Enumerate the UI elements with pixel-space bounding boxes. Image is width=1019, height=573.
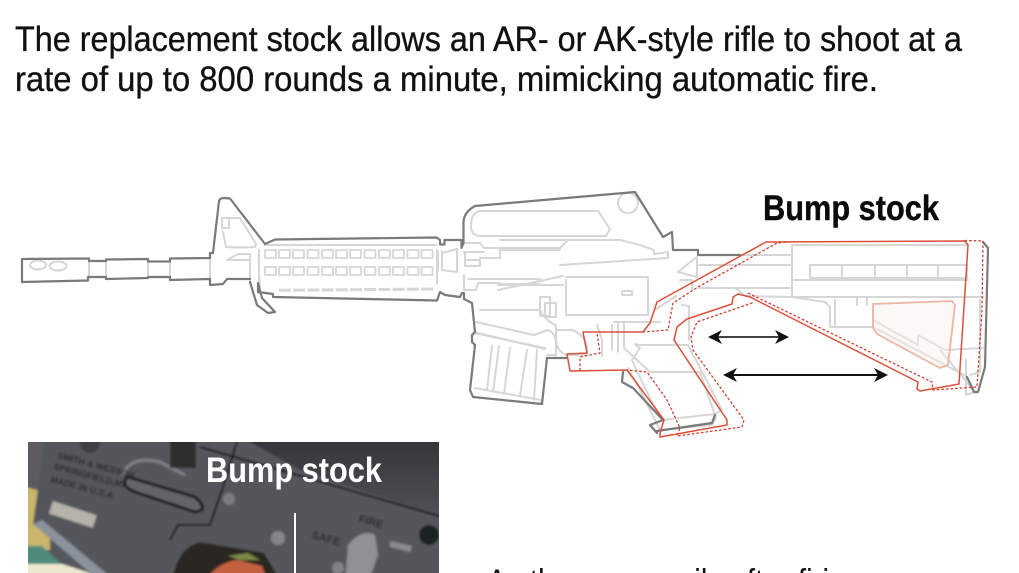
intro text [15, 20, 962, 99]
engraved markings [49, 450, 385, 548]
photo background and receiver [46, 538, 92, 573]
trigger guard and hand [172, 542, 282, 573]
rifle diagram [22, 189, 988, 437]
intro text: rate of up to 800 rounds a minute, mimicking automatic fire. [15, 60, 878, 99]
bump stock label: Bump stock [763, 189, 939, 228]
engraved markings: MADE IN U.S.A. [49, 474, 117, 501]
photo leader line [294, 513, 296, 573]
photo: bump stock on rifle [28, 442, 439, 573]
engraved markings: SPRINGFIELD,MA [52, 461, 130, 491]
photo label: Bump stock [206, 451, 382, 490]
engraved markings: SAFE [310, 529, 342, 548]
rifle inner details [30, 193, 983, 430]
bump stock inner shape [873, 301, 955, 368]
arrow: short recoil travel [708, 330, 789, 344]
intro text: The replacement stock allows an AR- or AK-style rifle to shoot at a [15, 20, 962, 59]
seams and ejection slot [168, 442, 439, 541]
engraved markings: SMITH & WESSON [56, 450, 136, 481]
bump stock rear-position dotted outline [580, 240, 983, 436]
engraved markings: FIRE [357, 513, 385, 531]
rifle outer outline [22, 192, 988, 433]
arrow: long recoil travel [723, 368, 888, 382]
bump stock forward-position red outline [567, 241, 968, 437]
